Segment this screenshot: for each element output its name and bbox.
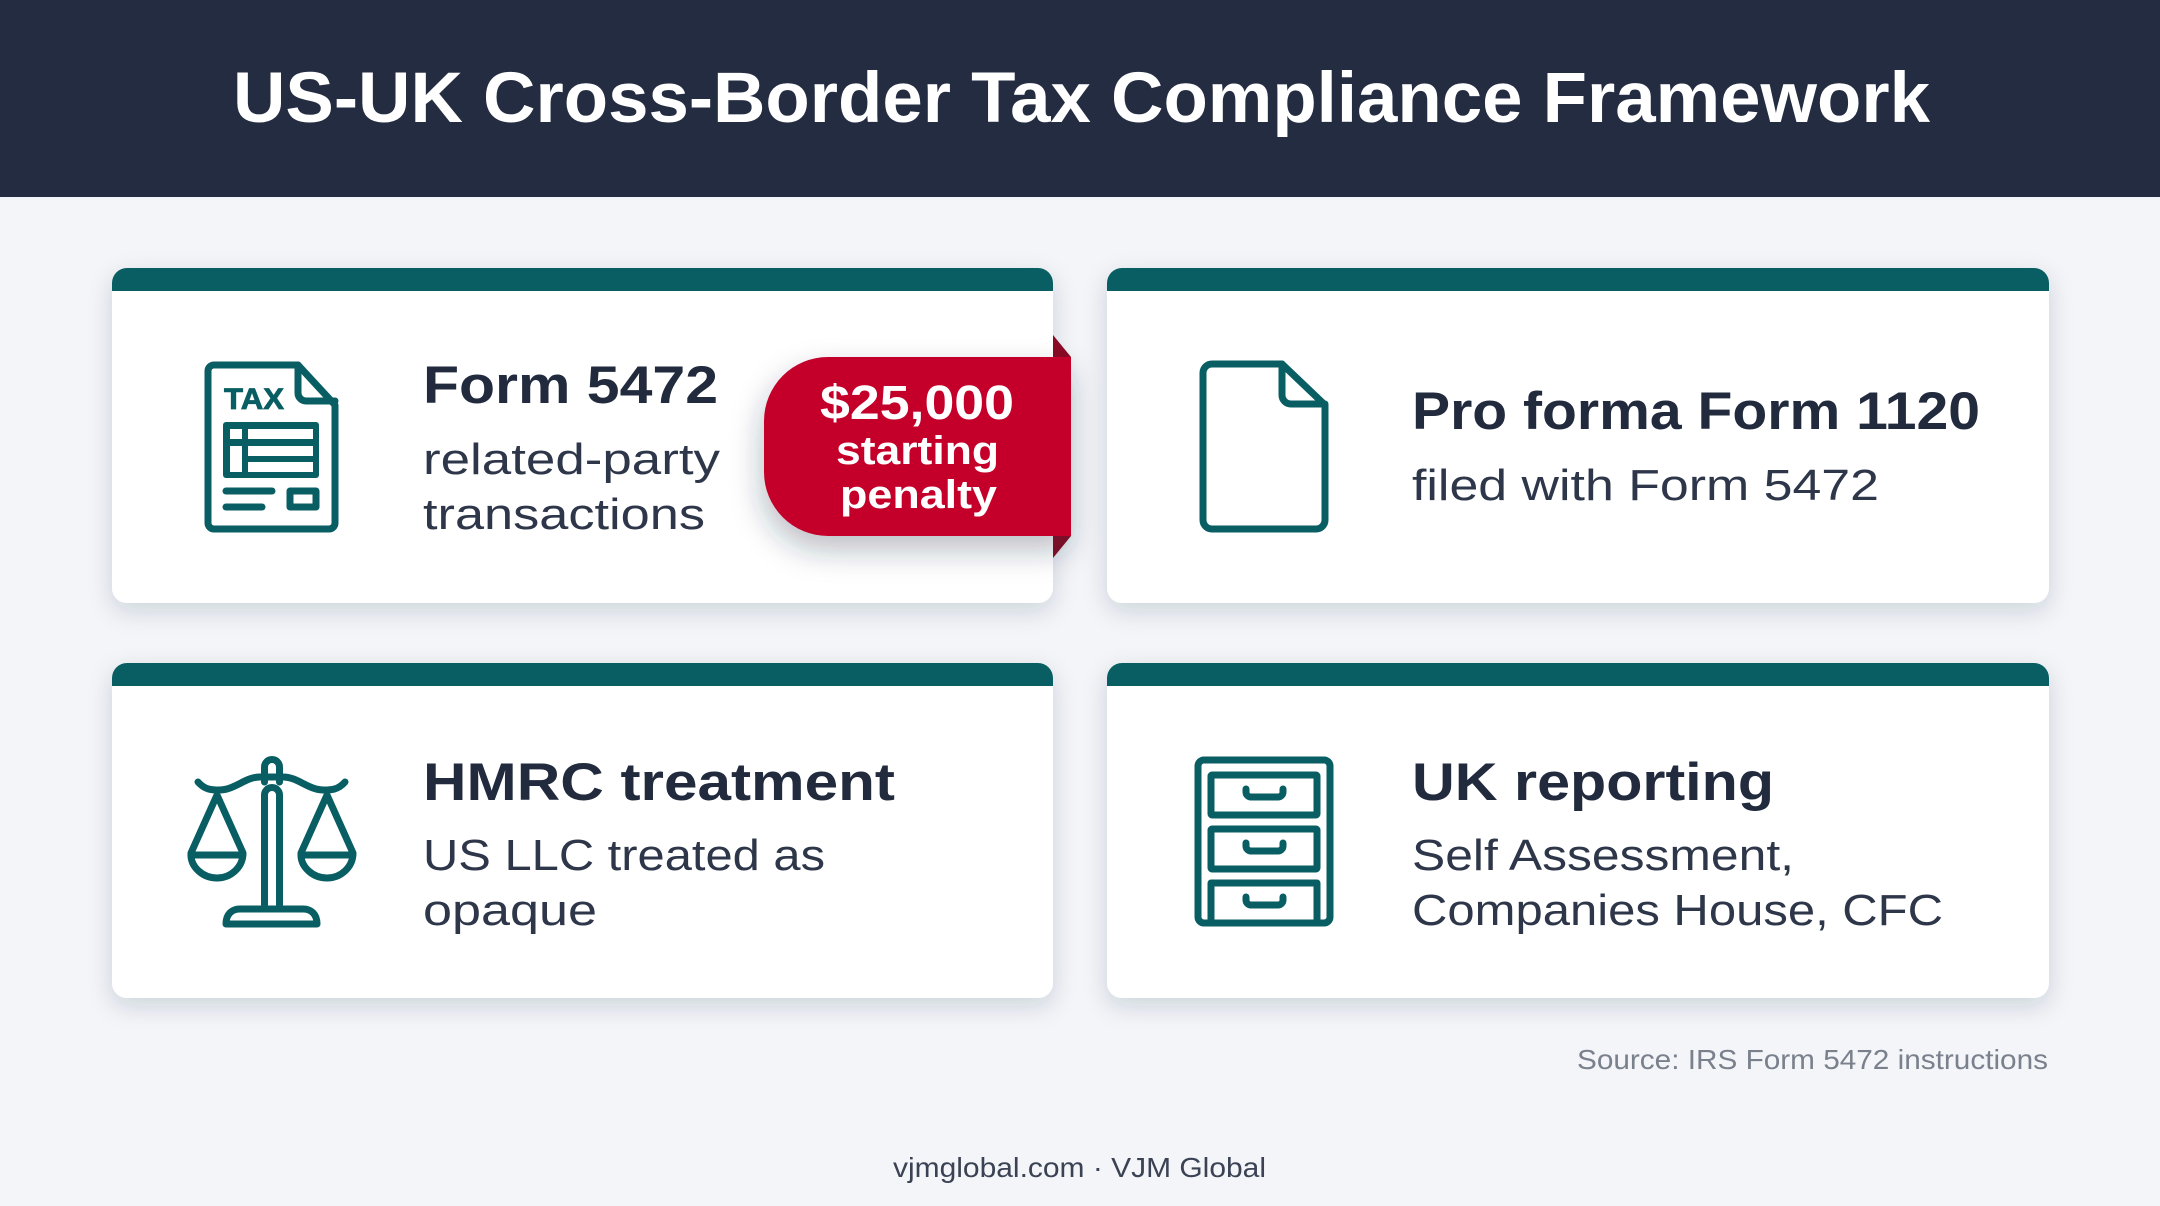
icon: tax form: TAX [224, 383, 284, 416]
callout: penalty ribbon: starting [836, 429, 999, 473]
icon: balance scales [191, 760, 353, 924]
text: US LLC treated as opaque: US LLC treated as [423, 831, 825, 880]
text: US LLC treated as opaque [423, 831, 825, 935]
text: related-party transactions: related-party [423, 435, 720, 484]
footer: vjmglobal.com · VJM Global [893, 1152, 1266, 1183]
text: Self Assessment, Companies House, CFC: Self Assessment, [1412, 831, 1794, 880]
heading: Pro forma Form 1120: Pro forma Form 1120 [1412, 382, 1980, 441]
text: US LLC treated as opaque: opaque [423, 886, 597, 935]
text: related-party transactions: transactions [423, 490, 705, 539]
text: Self Assessment, Companies House, CFC [1412, 831, 1943, 935]
panel: UK reporting [1107, 663, 2049, 998]
header band [0, 0, 2160, 197]
text: related-party transactions [423, 435, 720, 539]
heading: HMRC treatment: HMRC treatment [423, 753, 895, 812]
heading: UK reporting: UK reporting [1412, 753, 1774, 812]
icon: tax form [208, 365, 335, 529]
text: filed with Form 5472: filed with Form 5472 [1412, 461, 1879, 510]
heading: Form 5472: Form 5472 [423, 356, 718, 415]
panel: HMRC treatment [112, 663, 1053, 998]
title: US-UK Cross-Border Tax Compliance Framework [233, 59, 1931, 138]
icon: filing cabinet [1198, 760, 1330, 923]
callout: penalty ribbon: penalty [840, 473, 998, 517]
icon: document [1203, 364, 1325, 529]
source note: Source: IRS Form 5472 instructions [1577, 1044, 2048, 1075]
text: Self Assessment, Companies House, CFC: Companies House, CFC [1412, 886, 1943, 935]
panel: Form 5472 [112, 268, 1071, 603]
callout: penalty ribbon [764, 335, 1071, 558]
panel: Pro forma Form 1120 [1107, 268, 2049, 603]
callout: penalty ribbon: $25,000 [820, 377, 1014, 430]
